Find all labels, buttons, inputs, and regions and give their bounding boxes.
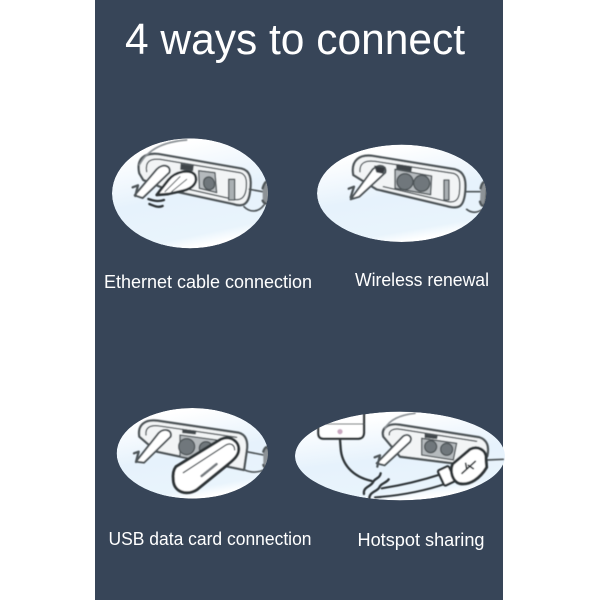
- panel: wireless renewal: [317, 145, 489, 290]
- illustration: router with USB dongle: [117, 408, 269, 499]
- panel: USB data card connection: [108, 408, 312, 549]
- illustration: router with antenna: [317, 145, 487, 242]
- illustration: router tethered to phone: [295, 412, 505, 500]
- label: USB data card connection: [108, 528, 312, 549]
- illustration: router with ethernet cable: [112, 138, 270, 248]
- title: 4 ways to connect: [125, 15, 465, 64]
- panel: ethernet cable connection: [104, 138, 312, 292]
- label: Ethernet cable connection: [104, 271, 312, 292]
- panel: hotspot sharing: [295, 412, 505, 550]
- label: Wireless renewal: [355, 269, 489, 290]
- background panel: [95, 0, 503, 600]
- label: Hotspot sharing: [358, 529, 484, 550]
